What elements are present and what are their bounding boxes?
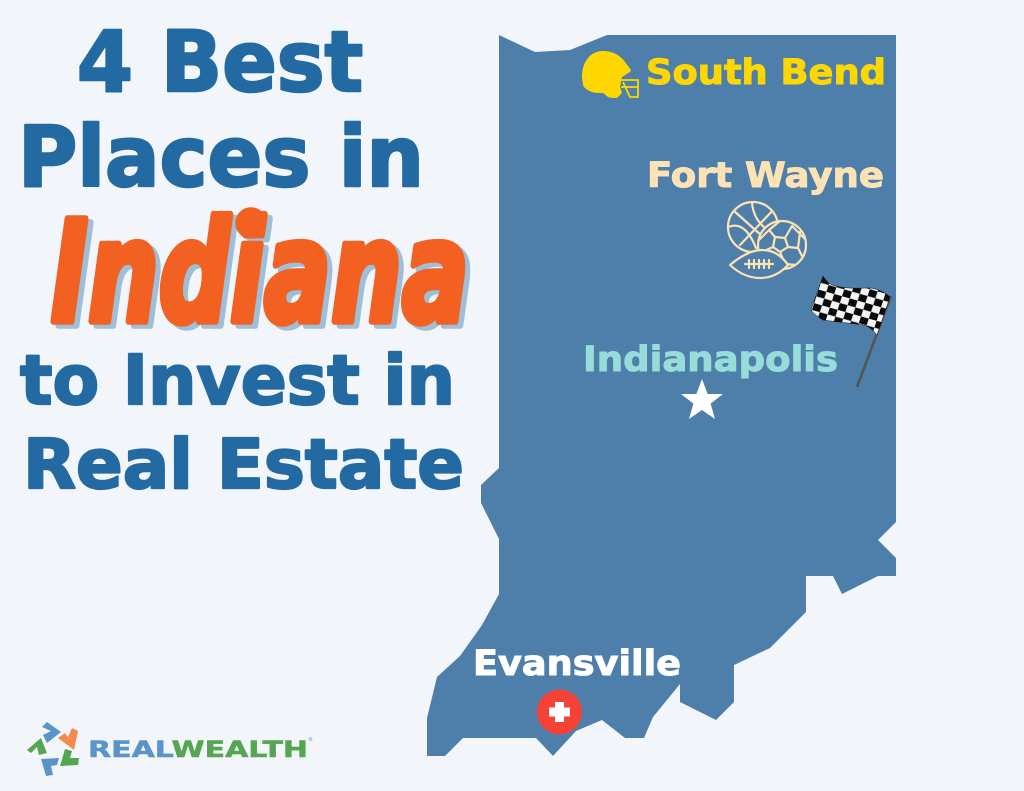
icon: medical cross (537, 690, 582, 734)
flag pole (857, 296, 891, 387)
shadow i-dot (244, 215, 268, 239)
basketball (728, 202, 778, 252)
title word: Indiana (51, 192, 474, 359)
icon: star (681, 379, 723, 419)
label: Evansville: Evansville (473, 644, 681, 684)
Indiana face (51, 192, 469, 355)
label: South Bend: South Bend (646, 53, 886, 93)
title line: Real Estate: Real Estate (23, 425, 464, 505)
shadow text: Indiana (56, 196, 474, 359)
label: Fort Wayne: Fort Wayne (647, 156, 884, 196)
logo mark (27, 722, 79, 776)
title line: Places in: Places in (18, 108, 424, 206)
icon: football helmet (582, 51, 638, 98)
american football (730, 250, 788, 278)
label: Indianapolis: Indianapolis (583, 340, 838, 380)
face i-dot (239, 211, 263, 235)
Indiana shadow (56, 196, 474, 359)
logo registered mark: ® (308, 737, 313, 743)
flag cloth (811, 276, 890, 335)
title (18, 13, 464, 505)
title line: 4 Best: 4 Best (77, 13, 363, 111)
icon: checkered flag (811, 276, 891, 387)
icon: sports balls (728, 202, 806, 278)
soccer ball (758, 221, 806, 272)
title line: to Invest in: to Invest in (20, 341, 455, 421)
face text: Indiana (51, 192, 469, 355)
logo wordmark: REAL WEALTH (88, 738, 308, 763)
logo: RealWealth (27, 722, 313, 776)
map of Indiana (427, 35, 896, 756)
